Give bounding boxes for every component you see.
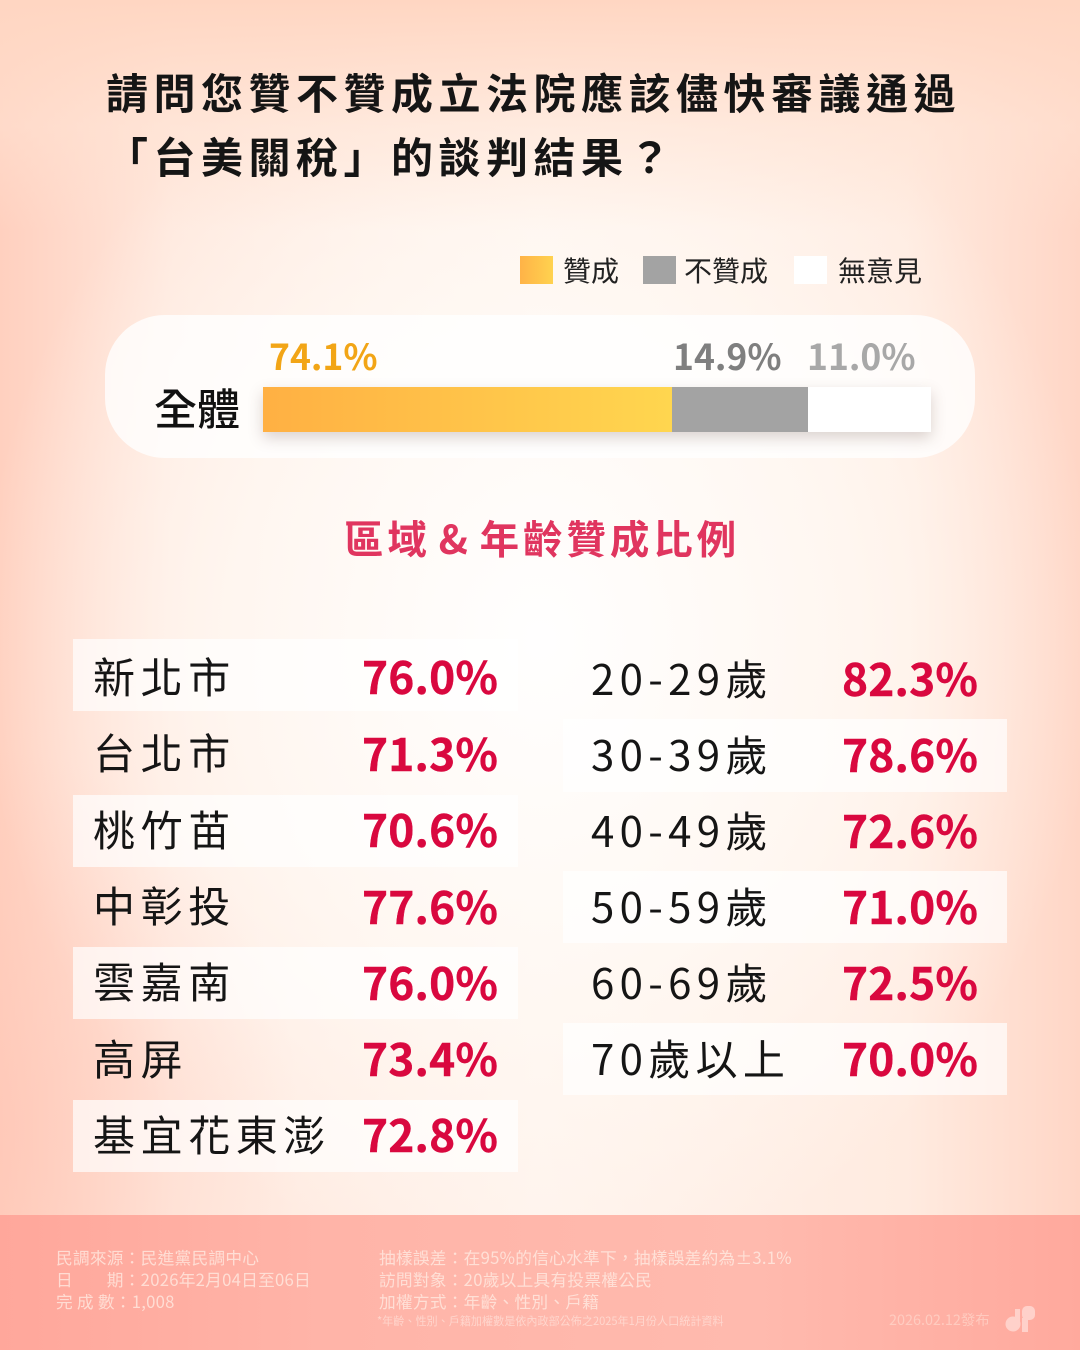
label 70+: 70歲以上 (591, 1027, 790, 1088)
label 50-59: 50-59歲 (591, 875, 773, 936)
section heading: 區域 & 年齡贊成比例 (344, 509, 740, 566)
icon: party logo (1006, 1306, 1035, 1332)
label 40-49: 40-49歲 (591, 799, 773, 860)
legend: no opinion label: 無意見 (838, 250, 922, 290)
legend: oppose swatch (643, 256, 676, 284)
overall no opinion percentage: 11.0% (807, 330, 916, 381)
legend (520, 250, 922, 290)
region row 雲嘉南 (73, 947, 518, 1019)
weighting footnote: *年齡、性別、戶籍加權數是依內政部公佈之2025年1月份人口統計資料 (377, 1313, 724, 1329)
label 桃竹苗: 桃竹苗 (93, 798, 236, 859)
value 桃竹苗: 70.6% (362, 796, 498, 860)
region row 基宜花東澎 (73, 1100, 518, 1172)
label 30-39: 30-39歲 (591, 723, 773, 784)
publish date: 2026.02.12發布 (889, 1309, 990, 1330)
value 高屏: 73.4% (362, 1025, 498, 1089)
overall label: 全體 (154, 376, 240, 438)
legend: favor label: 贊成 (563, 250, 619, 290)
label 高屏: 高屏 (93, 1027, 188, 1088)
value 雲嘉南: 76.0% (362, 949, 498, 1013)
legend: oppose label: 不贊成 (684, 250, 768, 290)
age row 50-59 (563, 871, 1007, 943)
value 40-49: 72.6% (842, 797, 978, 861)
age row 30-39 (563, 719, 1007, 792)
value 新北市: 76.0% (362, 643, 498, 707)
region row 新北市 (73, 639, 518, 711)
overall favor percentage: 74.1% (269, 330, 378, 381)
legend: favor swatch (520, 256, 553, 284)
label 中彰投: 中彰投 (93, 874, 236, 935)
value 60-69: 72.5% (842, 949, 978, 1013)
title: 「台美關稅」的談判結果？ (106, 125, 676, 186)
region row 桃竹苗 (73, 795, 518, 867)
overall oppose percentage: 14.9% (673, 330, 782, 381)
top peach glow (0, 0, 1080, 230)
label 60-69: 60-69歲 (591, 951, 773, 1012)
title (106, 61, 961, 186)
survey method block: 抽樣誤差：在95%的信心水準下，抽樣誤差約為±3.1% 訪問對象：20歲以上具有投票權公民 加權方式：年齡、性別、戶籍 (379, 1245, 792, 1313)
footer band (0, 1215, 1080, 1350)
value 70+: 70.0% (842, 1025, 978, 1089)
label 台北市: 台北市 (93, 721, 236, 782)
label 20-29: 20-29歲 (591, 647, 773, 708)
age row 70+ (563, 1023, 1007, 1095)
title: 請問您贊不贊成立法院應該儘快審議通過 (106, 61, 961, 122)
value 20-29: 82.3% (842, 645, 978, 709)
stacked bar (263, 387, 931, 432)
value 中彰投: 77.6% (362, 873, 498, 937)
label 雲嘉南: 雲嘉南 (93, 950, 236, 1011)
panel: overall result (105, 315, 975, 458)
value 台北市: 71.3% (362, 720, 498, 784)
value 50-59: 71.0% (842, 873, 978, 937)
value 基宜花東澎: 72.8% (362, 1101, 498, 1165)
bar segment: oppose (672, 387, 808, 432)
survey source block: 民調來源：民進黨民調中心 日 期：2026年2月04日至06日 完 成 數：1,008 (56, 1245, 311, 1313)
table: region (73, 639, 518, 1172)
bar segment: favor (263, 387, 672, 432)
value 30-39: 78.6% (842, 721, 978, 785)
table: age (563, 645, 1007, 1095)
legend: no opinion swatch (794, 256, 827, 284)
label 新北市: 新北市 (93, 645, 236, 706)
label 基宜花東澎: 基宜花東澎 (93, 1103, 331, 1164)
